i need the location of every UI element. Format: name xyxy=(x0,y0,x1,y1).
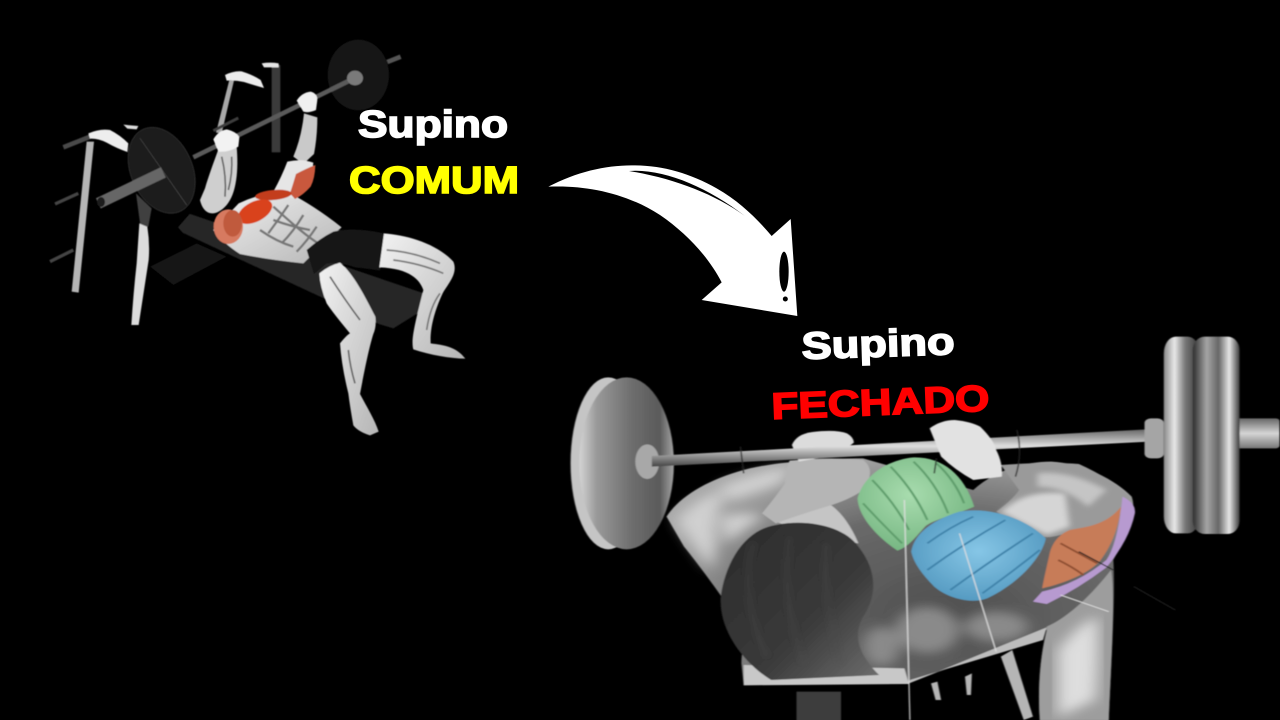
near weight plate xyxy=(97,117,208,224)
bench xyxy=(150,215,431,327)
barbell xyxy=(193,57,401,157)
left weight plate xyxy=(571,377,674,549)
chest and abdomen muscle shading xyxy=(863,607,1028,667)
heading: Supino second: Supino xyxy=(801,321,955,368)
head and hair xyxy=(721,498,879,680)
heading: COMUM: COMUM xyxy=(349,160,519,202)
green muscle xyxy=(858,457,974,551)
right weight plates xyxy=(1164,337,1240,534)
raised leg xyxy=(379,233,465,359)
left hand xyxy=(792,431,854,462)
right arm with red triceps xyxy=(273,92,317,199)
arrow xyxy=(548,165,797,316)
left side arm highlights xyxy=(677,467,790,570)
arrow body xyxy=(548,165,797,316)
dark leader lines xyxy=(740,430,1175,610)
heading: FECHADO: FECHADO xyxy=(771,378,990,427)
purple muscle rim xyxy=(1033,497,1135,604)
red chest muscles xyxy=(234,188,292,229)
bench xyxy=(744,627,1047,685)
raised upper arm xyxy=(762,458,870,523)
exclamation mark xyxy=(779,252,789,301)
blue muscle xyxy=(911,510,1046,601)
illustration: supino comum figure on bench xyxy=(50,40,465,435)
annotation lines xyxy=(904,500,1109,720)
supporting arm xyxy=(1039,570,1113,720)
orange muscle xyxy=(1042,507,1121,588)
figure body xyxy=(200,92,465,435)
right hand and forearm xyxy=(930,420,1129,537)
left arm xyxy=(200,129,239,213)
red shoulder muscle xyxy=(214,209,243,244)
torso xyxy=(667,458,1133,720)
barbell xyxy=(652,418,1280,467)
shorts xyxy=(307,230,384,274)
arrow slit xyxy=(629,171,745,216)
hanging straps xyxy=(931,650,1033,720)
far weight plate xyxy=(328,40,389,110)
lowered leg xyxy=(319,263,379,435)
torso with abs xyxy=(213,192,342,263)
heading: Supino: Supino xyxy=(358,104,508,146)
table leg xyxy=(796,692,841,720)
weight rack xyxy=(50,63,280,325)
illustration: supino fechado anatomical figure xyxy=(571,337,1280,720)
